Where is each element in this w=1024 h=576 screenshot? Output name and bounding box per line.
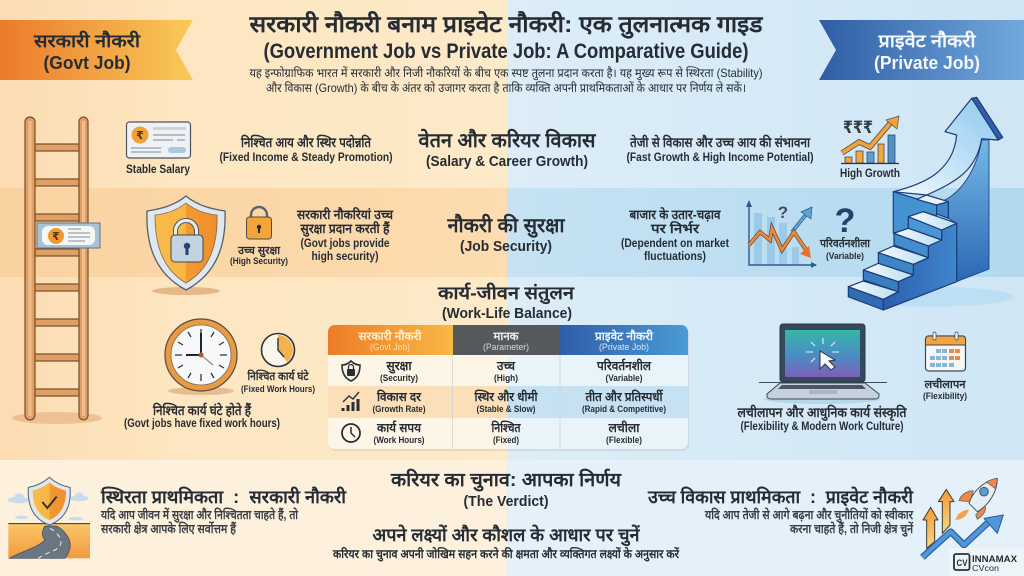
table row: security: सुरक्षा bbox=[386, 359, 412, 374]
icon: small clock bbox=[262, 334, 294, 366]
heading: the verdict bbox=[390, 468, 622, 510]
icon: rocket and growth arrows bbox=[922, 478, 1003, 557]
text: market dependence bbox=[621, 207, 729, 263]
icon: volatile market chart: ? bbox=[778, 203, 788, 222]
ribbon: government job: सरकारी नौकरी bbox=[33, 30, 141, 51]
label: fixed work hours: निश्चित कार्य घंटे bbox=[247, 369, 310, 383]
text: govt fixed hours: निश्चित कार्य घंटे होते हैं bbox=[152, 402, 252, 418]
text: fast growth: तेजी से विकास और उच्च आय की संभावना bbox=[629, 134, 810, 150]
label: fixed work hours: (Fixed Work Hours) bbox=[241, 384, 315, 395]
label: flexibility: (Flexibility) bbox=[923, 391, 967, 402]
icon: large shield bbox=[147, 196, 225, 295]
label: stable salary: Stable Salary bbox=[126, 162, 190, 176]
upper block wall bbox=[893, 192, 937, 233]
text: market dependence: पर निर्भर bbox=[650, 221, 700, 236]
ribbon: private job bbox=[819, 20, 1024, 80]
ladder illustration: ₹ bbox=[52, 231, 60, 243]
ribbon: government job: (Govt Job) bbox=[44, 53, 130, 73]
table row: growth rate: स्थिर और धीमी bbox=[474, 389, 538, 404]
icon: question mark: ? bbox=[835, 202, 855, 240]
table row: security: उच्च bbox=[496, 359, 516, 373]
text: high growth priority: उच्च विकास प्राथमिकता : प्राइवेट नौकरी bbox=[647, 486, 914, 507]
table row: growth rate bbox=[372, 389, 666, 415]
label: variable: (Variable) bbox=[826, 251, 864, 262]
icon: calendar bbox=[926, 332, 966, 371]
ribbon: private job: (Private Job) bbox=[874, 53, 980, 73]
label: flexibility: लचीलापन bbox=[923, 377, 966, 391]
label: variable bbox=[819, 236, 871, 262]
text: stability priority: स्थिरता प्राथमिकता : सरकारी नौकरी bbox=[100, 486, 347, 507]
icon: volatile market chart bbox=[746, 200, 817, 268]
intro text: यह इन्फोग्राफिक भारत में सरकारी और निजी नौकरियों के बीच एक स्पष्ट तुलना प्रदान करता है। यह मुख्य रूप से स्थिरता (Stability) bbox=[250, 66, 762, 81]
table row: growth rate: तीत और प्रतिस्पर्धी bbox=[585, 389, 664, 404]
label: high security bbox=[230, 245, 288, 267]
text: fast growth: (Fast Growth & High Income Potential) bbox=[626, 150, 814, 164]
arrow body bbox=[937, 140, 989, 282]
icon: laptop bbox=[759, 324, 887, 404]
label: high security: (High Security) bbox=[230, 256, 288, 267]
table header: सरकारी नौकरी bbox=[357, 329, 423, 343]
text: high growth priority: यदि आप तेजी से आगे बढ़ना और चुनौतियों को स्वीकार bbox=[704, 507, 914, 523]
heading: work-life balance: कार्य-जीवन संतुलन bbox=[437, 282, 575, 305]
heading: job security: नौकरी की सुरक्षा bbox=[447, 213, 565, 238]
logo: Innamax CVcon: CV bbox=[956, 558, 968, 568]
table row: security: परिवर्तनशील bbox=[596, 358, 651, 373]
table row: security: (Security) bbox=[380, 373, 418, 384]
text: market dependence: (Dependent on market bbox=[621, 236, 729, 250]
text: choose by goals: करियर का चुनाव अपनी जोखिम सहन करने की क्षमता और व्यक्तिगत लक्ष्यों के अनुसार करें bbox=[332, 547, 680, 562]
icon: wall clock bbox=[165, 319, 237, 395]
table row: work hours: (Flexible) bbox=[606, 435, 642, 446]
text: government security bbox=[296, 207, 394, 263]
heading: job security bbox=[447, 213, 565, 255]
heading: salary and career growth: वेतन और करियर विकास bbox=[418, 128, 597, 152]
icon: staircase with arrow bbox=[847, 97, 1013, 310]
label: flexibility bbox=[923, 377, 967, 402]
title: (Government Job vs Private Job: A Comparative Guide) bbox=[264, 40, 748, 63]
arrow head dark facet bbox=[972, 97, 1003, 140]
stair side bbox=[883, 223, 957, 310]
text: flexibility and modern work culture bbox=[737, 404, 908, 433]
icon: small padlock bbox=[246, 207, 272, 239]
table header: (Parameter) bbox=[483, 342, 529, 352]
label: high growth: High Growth bbox=[840, 166, 900, 180]
table header: (Govt Job) bbox=[370, 342, 410, 352]
heading: work-life balance bbox=[437, 282, 575, 322]
table row: work hours bbox=[374, 420, 642, 446]
table header: (Private Job) bbox=[599, 342, 649, 352]
text: stability priority: यदि आप जीवन में सुरक्षा और निश्चितता चाहते हैं, तो bbox=[100, 507, 299, 523]
table header: प्राइवेट नौकरी bbox=[594, 329, 654, 343]
logo: Innamax CVcon: INNAMAX bbox=[972, 554, 1017, 564]
table row: growth rate: (Rapid & Competitive) bbox=[582, 404, 666, 415]
text: high growth priority: करना चाहते हैं, तो निजी क्षेत्र चुनें bbox=[789, 521, 914, 537]
intro text bbox=[250, 66, 762, 95]
text: flexibility and modern work culture: (Flexibility & Modern Work Culture) bbox=[740, 419, 904, 433]
text: government security: सुरक्षा प्रदान करती हैं bbox=[300, 221, 391, 237]
icon: shield with road bbox=[8, 477, 90, 558]
table row: growth rate: विकास दर bbox=[376, 389, 422, 404]
table row: security: (Variable) bbox=[606, 373, 642, 384]
icon: salary card bbox=[126, 122, 190, 158]
heading: salary and career growth bbox=[418, 128, 597, 170]
table row: work hours: (Work Hours) bbox=[374, 435, 424, 446]
text: market dependence: fluctuations) bbox=[644, 249, 706, 263]
table row icons bbox=[342, 361, 360, 442]
text: stability priority bbox=[100, 486, 347, 536]
table row: growth rate: (Growth Rate) bbox=[372, 404, 426, 415]
text: market dependence: बाजार के उतार-चढ़ाव bbox=[629, 207, 721, 222]
text: choose by goals: अपने लक्ष्यों और कौशल के आधार पर चुनें bbox=[372, 524, 640, 547]
table row: growth rate: (Stable & Slow) bbox=[476, 404, 536, 415]
text: government security: सरकारी नौकरियां उच्च bbox=[296, 207, 394, 222]
table row: work hours: कार्य सपय bbox=[376, 420, 422, 435]
text: fixed income bbox=[220, 134, 392, 164]
ladder illustration bbox=[12, 117, 102, 424]
text: fixed income: निश्चित आय और स्थिर पदोन्नति bbox=[240, 134, 372, 150]
text: govt fixed hours bbox=[124, 402, 280, 430]
table row: security: (High) bbox=[494, 373, 518, 384]
heading: the verdict: (The Verdict) bbox=[464, 493, 548, 510]
table row: work hours: निश्चित bbox=[491, 420, 521, 435]
step risers bbox=[908, 217, 942, 240]
title bbox=[248, 10, 763, 63]
table header: मानक bbox=[493, 331, 520, 343]
heading: the verdict: करियर का चुनाव: आपका निर्णय bbox=[390, 468, 622, 492]
icon: high growth chart: ₹₹₹ bbox=[843, 118, 873, 137]
table row: work hours: लचीला bbox=[608, 420, 640, 435]
text: government security: (Govt jobs provide bbox=[300, 236, 390, 250]
comparison table bbox=[328, 325, 689, 451]
arrow light surface bbox=[893, 98, 998, 195]
text: choose by goals bbox=[332, 524, 680, 562]
text: fast growth bbox=[626, 134, 814, 164]
ribbon: government job bbox=[0, 20, 193, 80]
label: high security: उच्च सुरक्षा bbox=[237, 245, 281, 258]
table row: work hours: (Fixed) bbox=[493, 435, 519, 446]
icon: salary card: ₹ bbox=[136, 130, 144, 142]
ribbon: private job: प्राइवेट नौकरी bbox=[877, 30, 977, 51]
intro text: और विकास (Growth) के बीच के अंतर को उजागर करता है ताकि व्यक्ति अपनी प्राथमिकताओं के आधार पर निर्णय ले सकें। bbox=[266, 81, 746, 95]
text: fixed income: (Fixed Income & Steady Promotion) bbox=[220, 150, 392, 164]
table row: security bbox=[380, 358, 651, 384]
text: stability priority: सरकारी क्षेत्र आपके लिए सर्वोत्तम हैं bbox=[100, 521, 237, 536]
table header bbox=[357, 329, 654, 352]
title: सरकारी नौकरी बनाम प्राइवेट नौकरी: एक तुलनात्मक गाइड bbox=[248, 10, 763, 39]
text: govt fixed hours: (Govt jobs have fixed work hours) bbox=[124, 416, 280, 430]
text: high growth priority bbox=[647, 486, 914, 537]
heading: work-life balance: (Work-Life Balance) bbox=[442, 305, 572, 322]
step treads bbox=[908, 212, 957, 230]
text: flexibility and modern work culture: लचीलापन और आधुनिक कार्य संस्कृति bbox=[737, 404, 908, 421]
label: fixed work hours bbox=[241, 369, 315, 395]
logo: Innamax CVcon: CVcon bbox=[972, 563, 999, 573]
logo: Innamax CVcon bbox=[949, 548, 1024, 576]
label: variable: परिवर्तनशीला bbox=[819, 236, 871, 250]
heading: salary and career growth: (Salary & Career Growth) bbox=[426, 153, 588, 170]
icon: high growth chart bbox=[841, 116, 899, 164]
text: government security: high security) bbox=[312, 249, 378, 263]
heading: job security: (Job Security) bbox=[460, 238, 552, 255]
